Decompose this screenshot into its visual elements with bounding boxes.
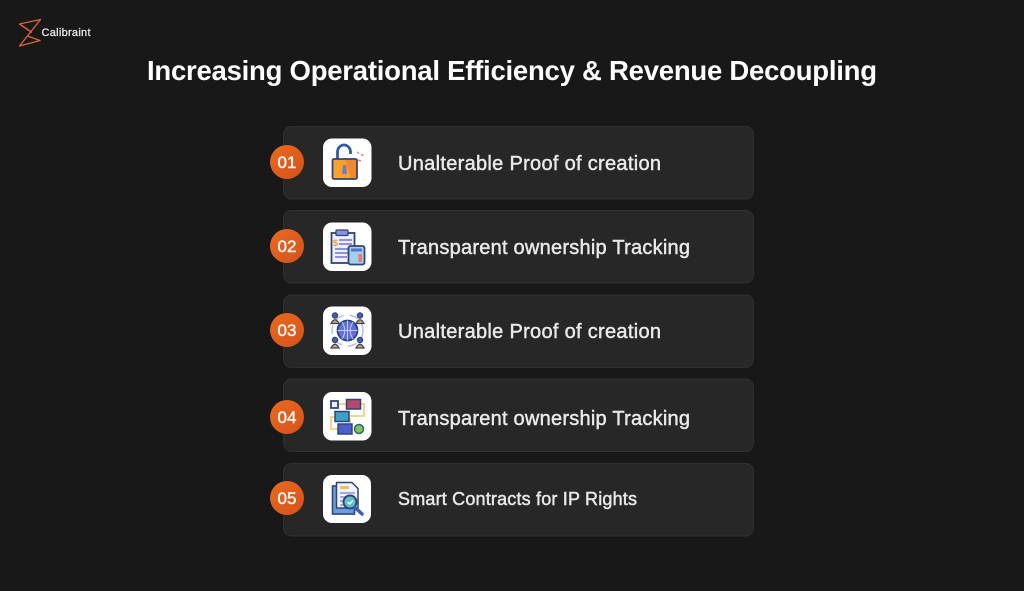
panel: item 04 bbox=[270, 379, 754, 452]
badge 05 bbox=[270, 481, 304, 515]
badge 02 bbox=[270, 229, 304, 263]
item text: Transparent ownership Tracking bbox=[398, 408, 690, 430]
logo: Calibraint: Calibraint bbox=[42, 27, 90, 39]
item text: Smart Contracts for IP Rights bbox=[398, 489, 637, 509]
badge 04: 04 bbox=[278, 408, 296, 427]
badge 03 bbox=[270, 313, 304, 347]
icon: workflow diagram bbox=[323, 392, 372, 440]
icon: open padlock bbox=[323, 138, 372, 187]
panel: item 03 bbox=[270, 295, 754, 368]
item text: Transparent ownership Tracking bbox=[398, 237, 690, 259]
badge 01 bbox=[270, 145, 304, 179]
panel: item 01 bbox=[270, 126, 754, 199]
logo: Calibraint bbox=[20, 20, 90, 46]
badge 02: 02 bbox=[278, 237, 296, 256]
panel: item 05 bbox=[270, 464, 754, 536]
icon: clipboard and calculator bbox=[323, 222, 372, 271]
badge 05: 05 bbox=[278, 489, 296, 508]
icon: globe with people bbox=[323, 306, 372, 355]
icon: clipboard and calculator: $ bbox=[333, 238, 338, 248]
badge 01: 01 bbox=[278, 153, 296, 172]
badge 04 bbox=[270, 400, 304, 434]
item text: Unalterable Proof of creation bbox=[398, 321, 661, 343]
icon: document with magnifier bbox=[323, 475, 371, 523]
item text: Unalterable Proof of creation bbox=[398, 153, 661, 175]
title: Increasing Operational Efficiency & Revenue Decoupling bbox=[147, 55, 877, 86]
panel: item 02 bbox=[270, 210, 754, 283]
badge 03: 03 bbox=[278, 321, 296, 340]
